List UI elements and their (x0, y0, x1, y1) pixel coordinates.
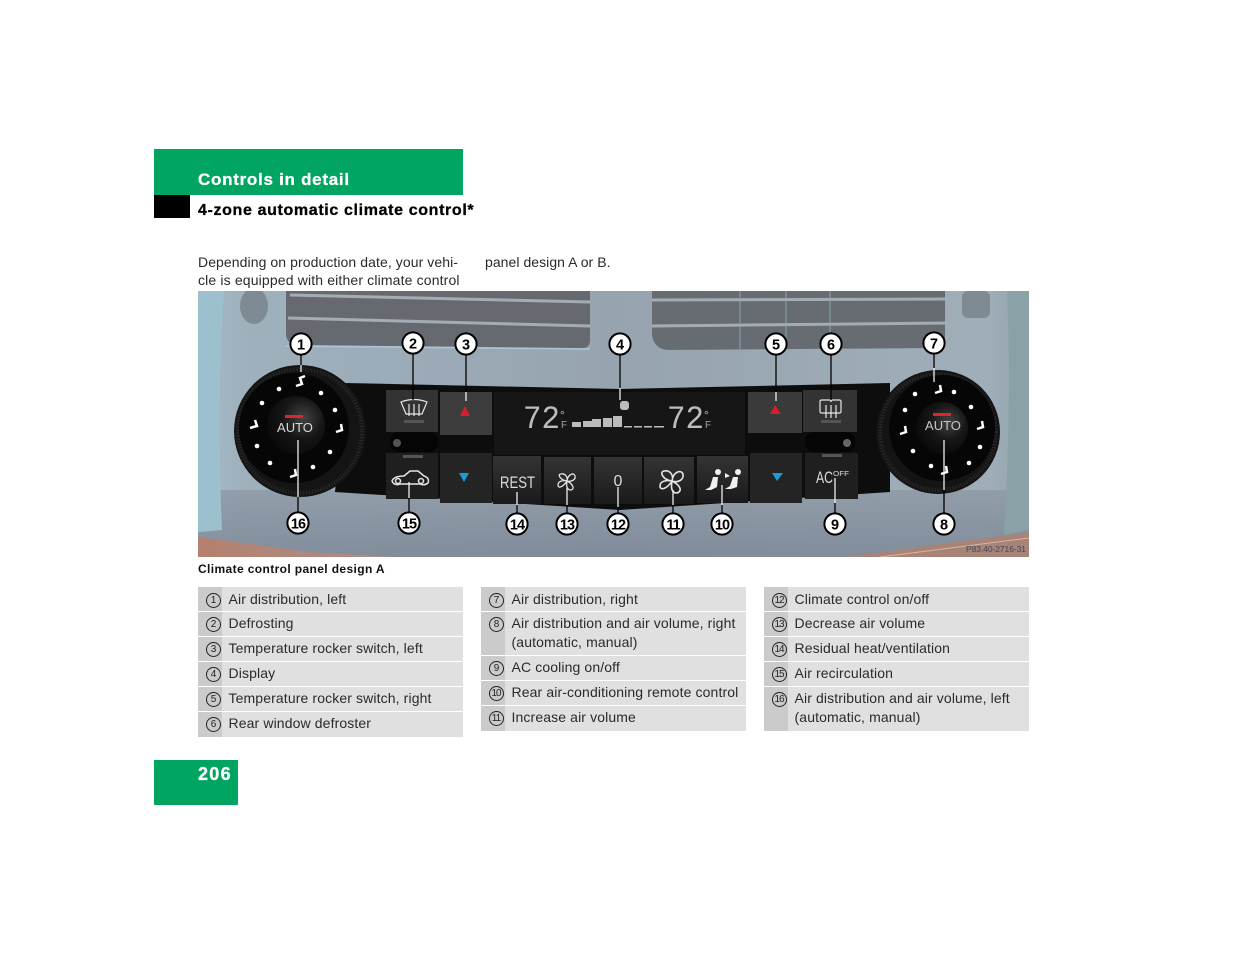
legend item 12: Climate control on/off (794, 591, 929, 607)
legend item 13: Decrease air volume (794, 615, 925, 631)
legend item 11 (481, 706, 746, 731)
caption: Climate control panel design A (198, 562, 385, 576)
legend item 14: Residual heat/ventilation (794, 640, 950, 656)
button labels: REST (500, 473, 535, 492)
legend item 10: Rear air-conditioning remote control (512, 684, 738, 700)
left air vent (286, 291, 590, 349)
black button panel (335, 383, 890, 510)
legend item 6: Rear window defroster (228, 715, 371, 731)
button labels: AC (816, 468, 833, 487)
legend item 10 (481, 681, 746, 706)
number callouts: 12 (611, 518, 626, 534)
legend item 3: 3 (211, 644, 215, 655)
legend column 3 (764, 587, 1029, 731)
dashboard background (198, 291, 1029, 557)
number callouts: 13 (560, 518, 575, 534)
icon: rear defroster (820, 400, 841, 418)
photo reference code: P83.40-2716-31 (966, 544, 1026, 554)
display: ° (704, 408, 709, 422)
legend item 12 (764, 587, 1029, 612)
legend item 11: 11 (492, 713, 500, 724)
legend column 1 (198, 587, 463, 737)
display (494, 392, 745, 455)
legend item 16: Air distribution and air volume, left (794, 690, 1010, 706)
icon: windshield defrost (401, 400, 427, 416)
legend item 1: Air distribution, left (228, 591, 346, 607)
icon: fan large (660, 471, 683, 493)
display: 72 (667, 401, 704, 438)
icon: fan small (558, 474, 575, 490)
number callouts: 2 (409, 336, 417, 352)
legend item 3 (198, 637, 463, 662)
legend item 5 (198, 687, 463, 712)
subheading: 4-zone automatic climate control* (198, 202, 474, 219)
right air vent (652, 291, 945, 350)
button labels: 0 (614, 473, 623, 490)
number callouts: 10 (715, 518, 730, 534)
legend item 16 (764, 687, 1029, 731)
photo: climate control panel (198, 291, 1029, 557)
number callouts: 11 (666, 518, 681, 534)
intro text column 2: panel design A or B. (485, 254, 611, 270)
number callouts: 6 (827, 338, 835, 354)
legend item 1 (198, 587, 463, 612)
display: ° (560, 408, 565, 422)
legend item 15 (764, 662, 1029, 687)
intro text column 1 (198, 254, 460, 288)
right dial: AUTO (925, 418, 961, 433)
rocker gaps (390, 432, 438, 452)
number callouts: 16 (291, 516, 306, 532)
legend item 15: Air recirculation (794, 665, 893, 681)
legend item 9: AC cooling on/off (512, 659, 620, 675)
icon: recirculation car (392, 471, 428, 485)
number callouts: 14 (510, 518, 525, 534)
legend item 16: (automatic, manual) (794, 709, 920, 725)
legend item 3: Temperature rocker switch, left (228, 640, 423, 656)
section title: Controls in detail (198, 170, 350, 189)
number callouts: 7 (930, 336, 938, 352)
small side slot (962, 291, 990, 318)
legend item 6 (198, 712, 463, 737)
legend item 14 (764, 637, 1029, 662)
left dial (234, 365, 366, 497)
display: F (561, 420, 567, 431)
arrows: temperature (459, 405, 783, 482)
legend item 4 (198, 662, 463, 687)
header band: section (154, 149, 463, 195)
black marker block (154, 195, 190, 218)
legend item 5: 5 (211, 694, 215, 705)
legend item 5: Temperature rocker switch, right (228, 690, 432, 706)
intro text column 1: Depending on production date, your vehi- (198, 254, 458, 270)
legend item 4: Display (228, 665, 275, 681)
legend column 2 (481, 587, 746, 731)
display: F (705, 420, 711, 431)
legend item 9 (481, 656, 746, 681)
legend item 14: 14 (774, 644, 784, 655)
legend item 11: Increase air volume (512, 709, 636, 725)
number callouts: 9 (831, 518, 839, 534)
legend item 13 (764, 612, 1029, 637)
number callouts: 8 (940, 518, 948, 534)
number callouts: 5 (772, 338, 780, 354)
page number: 206 (198, 764, 232, 784)
page number block (154, 760, 238, 805)
legend item 16: 16 (774, 694, 784, 705)
legend item 7: 7 (494, 595, 498, 606)
icon: rear seats (705, 469, 741, 490)
number callouts: 15 (402, 516, 417, 532)
legend item 2 (198, 612, 463, 637)
legend item 8: Air distribution and air volume, right (512, 615, 736, 631)
wood trim (198, 532, 1029, 557)
legend item 8 (481, 612, 746, 656)
button labels (500, 468, 849, 492)
number callouts: 1 (297, 338, 305, 354)
legend item 8: 8 (494, 619, 498, 630)
left vent knob slot (240, 288, 268, 324)
legend item 7: Air distribution, right (512, 591, 638, 607)
legend item 13: 13 (774, 619, 784, 630)
legend item 6: 6 (211, 719, 215, 730)
number callouts: 3 (462, 338, 470, 354)
legend item 2: 2 (211, 619, 215, 630)
right dial (876, 370, 1000, 494)
legend item 9: 9 (494, 663, 498, 674)
legend item 2: Defrosting (228, 615, 294, 631)
legend item 8: (automatic, manual) (512, 634, 638, 650)
left dial: AUTO (277, 420, 313, 435)
legend item 12: 12 (774, 595, 784, 606)
legend item 1: 1 (211, 595, 215, 606)
legend item 15: 15 (774, 669, 784, 680)
button labels: OFF (833, 469, 849, 478)
intro text column 1: cle is equipped with either climate control (198, 272, 460, 288)
legend item 4: 4 (211, 669, 215, 680)
number callouts (287, 332, 955, 535)
number callouts: 4 (616, 338, 624, 354)
buttons (386, 390, 858, 504)
legend item 10: 10 (491, 688, 501, 699)
leader lines (298, 354, 944, 513)
display: 72 (523, 401, 560, 438)
legend item 7 (481, 587, 746, 612)
